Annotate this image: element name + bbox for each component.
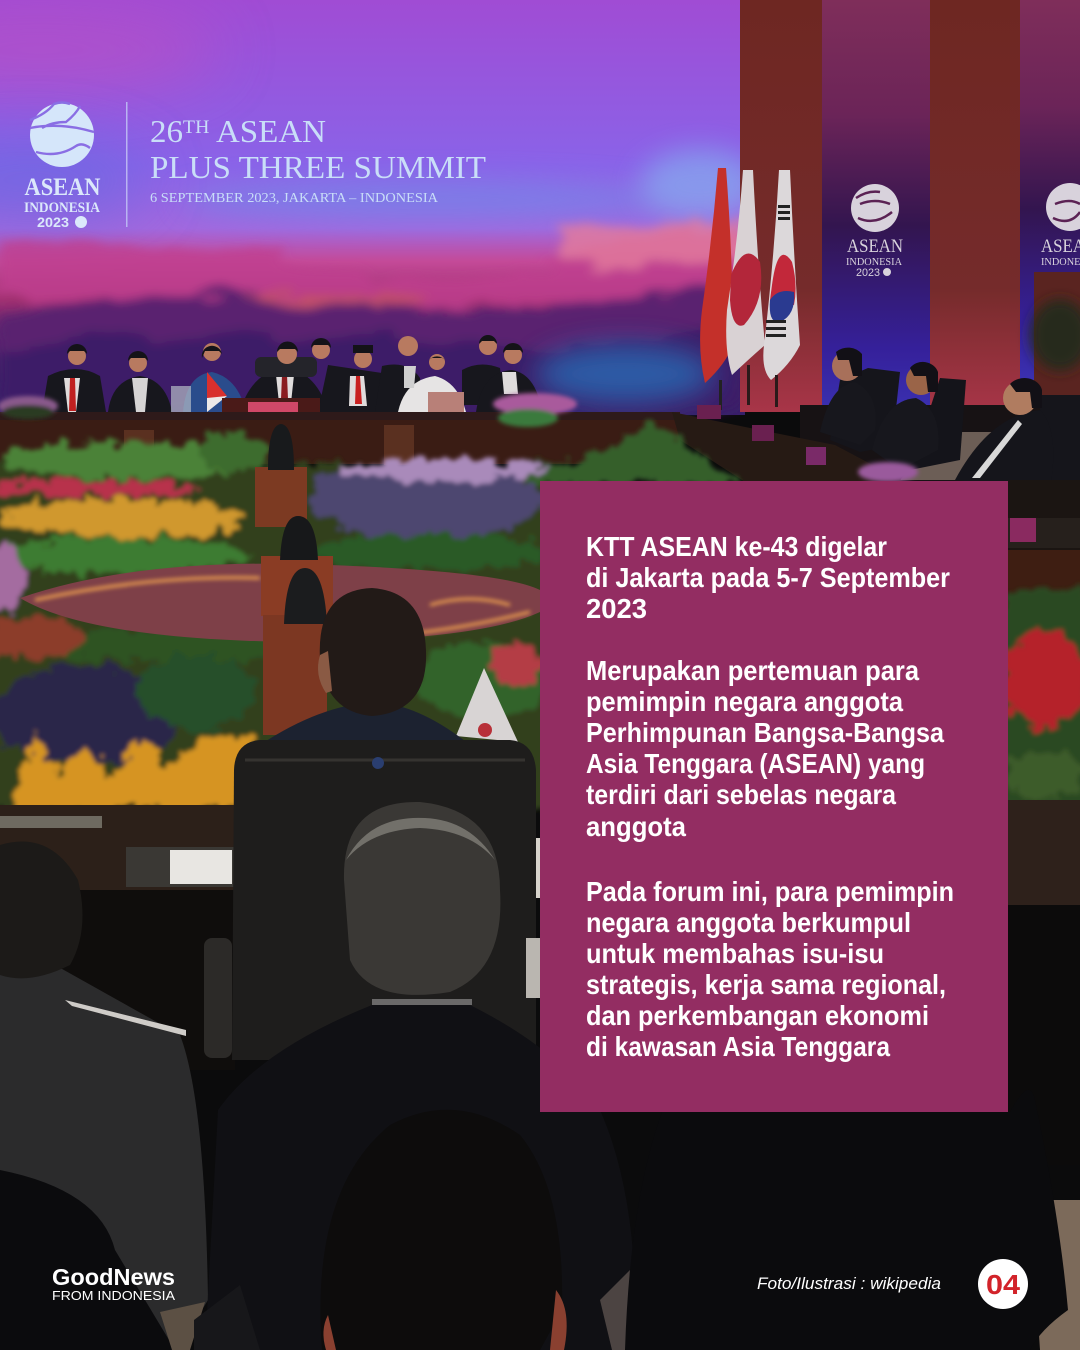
second paragraph: Perhimpunan Bangsa-Bangsa: [586, 717, 945, 748]
far table with flower arrangements: [0, 393, 680, 465]
ASEAN Indonesia 2023 logo: INDONESIA: [24, 200, 100, 216]
summit title on screen: 26ᵀᴴ ASEAN: [150, 113, 326, 149]
summit title on screen: PLUS THREE SUMMIT: [150, 149, 486, 185]
microphone podiums: [255, 424, 333, 735]
second paragraph: anggota: [586, 811, 687, 842]
first paragraph: [586, 531, 950, 624]
back of leader in chair: [204, 588, 540, 1060]
near table top: [0, 800, 1080, 1165]
right wall pillars and banners: INDONESIA: [846, 256, 902, 268]
GoodNews from Indonesia logo: FROM INDONESIA: [52, 1289, 176, 1303]
ASEAN Indonesia 2023 logo: ASEAN: [24, 174, 100, 201]
delegates seated on the far table: [42, 335, 542, 416]
third paragraph: Pada forum ini, para pemimpin: [586, 876, 954, 907]
second paragraph: terdiri dari sebelas negara: [586, 779, 897, 810]
third paragraph: untuk membahas isu-isu: [586, 938, 884, 969]
side delegates and right table: [672, 348, 1080, 630]
seated delegate at lower left: [0, 842, 208, 1350]
page number badge: [978, 1259, 1028, 1309]
first paragraph: 2023: [586, 593, 647, 624]
photo credit: Foto/Ilustrasi : wikipedia: [757, 1274, 941, 1293]
GoodNews from Indonesia logo: GoodNews: [52, 1264, 175, 1290]
ASEAN Indonesia 2023 logo: 2023: [37, 214, 69, 230]
page number badge: 04: [986, 1269, 1020, 1300]
summit title on screen: [126, 102, 486, 227]
flags of China, Japan and South Korea: [700, 168, 800, 410]
right wall pillars and banners: [740, 0, 1080, 412]
seated delegate centre, grey hair: [205, 802, 636, 1350]
third paragraph: di kawasan Asia Tenggara: [586, 1031, 891, 1062]
GoodNews from Indonesia logo: [52, 1264, 176, 1303]
ASEAN Indonesia 2023 logo: [24, 102, 100, 230]
third paragraph: dan perkembangan ekonomi: [586, 1000, 929, 1031]
first paragraph: KTT ASEAN ke-43 digelar: [586, 531, 887, 562]
third paragraph: [586, 876, 954, 1062]
foreground delegate head, bottom centre: [320, 1110, 567, 1350]
small Korean table flag: [456, 668, 518, 742]
second paragraph: Asia Tenggara (ASEAN) yang: [586, 748, 925, 779]
first paragraph: di Jakarta pada 5-7 September: [586, 562, 950, 593]
text panel: [540, 481, 1008, 1112]
summit title on screen: 6 SEPTEMBER 2023, JAKARTA – INDONESIA: [150, 191, 439, 206]
garden floral centrepiece: [0, 425, 1080, 812]
stage backdrop screen: [0, 0, 760, 415]
right wall pillars and banners: ASEAN: [847, 236, 903, 257]
right wall pillars and banners: 2023: [856, 267, 880, 279]
second paragraph: Merupakan pertemuan para: [586, 655, 920, 686]
third paragraph: strategis, kerja sama regional,: [586, 969, 946, 1000]
seated delegate lower right and floor: [160, 1090, 1080, 1350]
second paragraph: [586, 655, 945, 842]
third paragraph: negara anggota berkumpul: [586, 907, 911, 938]
second paragraph: pemimpin negara anggota: [586, 686, 904, 717]
